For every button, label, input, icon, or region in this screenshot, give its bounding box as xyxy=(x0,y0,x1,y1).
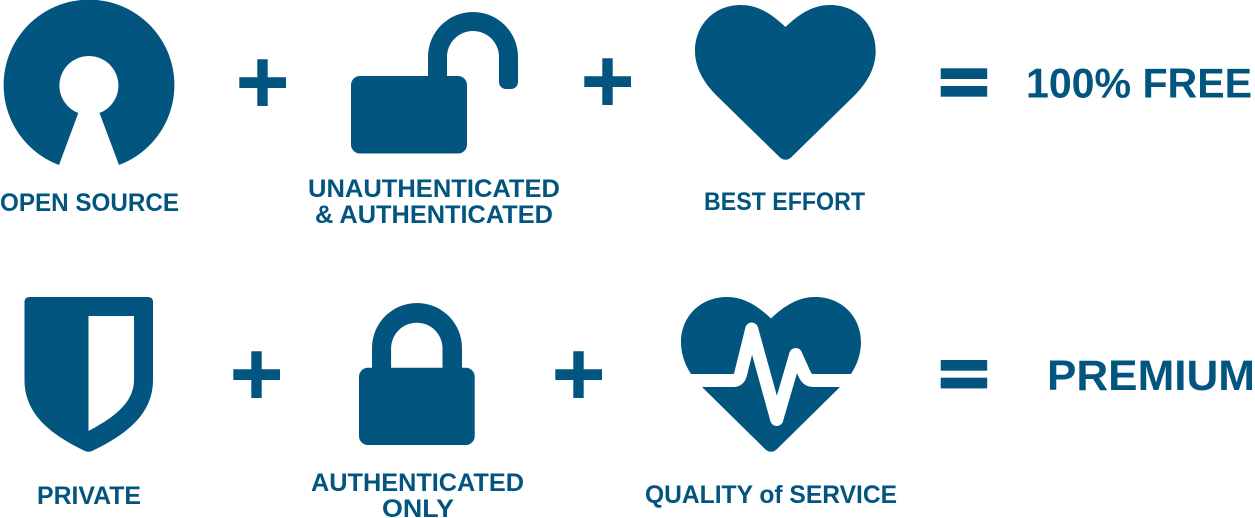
label: unauthenticated and authenticated: UNAUTHENTICATED xyxy=(308,175,560,203)
icon: plus xyxy=(584,58,631,105)
icon: heart with pulse line xyxy=(675,297,867,452)
label: authenticated only xyxy=(311,469,524,518)
label: best effort: BEST EFFORT xyxy=(704,188,865,216)
icon: heart xyxy=(695,5,876,160)
row: premium xyxy=(24,297,1255,518)
label: open source: OPEN SOURCE xyxy=(0,189,179,217)
icon: shield xyxy=(24,297,153,452)
label: unauthenticated and authenticated xyxy=(308,175,560,229)
icon: equals xyxy=(941,68,987,97)
label: private: PRIVATE xyxy=(37,482,141,510)
icon: plus xyxy=(555,351,602,398)
result: 100% free: 100% FREE xyxy=(1026,60,1252,107)
row: 100% free xyxy=(0,0,1252,229)
label: quality of service: QUALITY of SERVICE xyxy=(645,481,897,509)
icon: open source keyhole xyxy=(4,0,174,165)
icon: closed padlock xyxy=(359,303,475,445)
label: unauthenticated and authenticated: & AUTHENTICATED xyxy=(315,201,553,229)
icon: plus xyxy=(239,59,286,106)
result: premium: PREMIUM xyxy=(1047,352,1255,400)
icon: plus xyxy=(233,351,280,398)
icon: equals xyxy=(941,360,987,388)
label: authenticated only: AUTHENTICATED xyxy=(311,469,524,497)
icon: open padlock xyxy=(351,12,518,154)
